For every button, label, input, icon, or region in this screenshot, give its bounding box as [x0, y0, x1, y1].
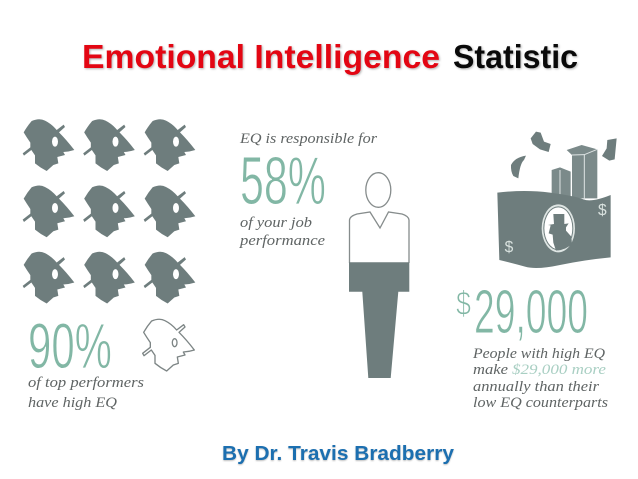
caption: top performers: have high EQ: [28, 395, 117, 411]
caption: top performers: of top performers: [28, 375, 144, 391]
caption: job performance: [239, 215, 325, 249]
title: Statistic: [453, 38, 578, 75]
icon: portrait medallion: [542, 204, 575, 252]
icon: person figure: [349, 173, 409, 378]
icon: dollar signs: [505, 202, 607, 256]
byline: By Dr. Travis Bradberry: [222, 443, 455, 465]
stat: 90%: 90%: [28, 310, 112, 382]
icon: banknote: [497, 191, 611, 268]
stat: $29,000: $: [456, 285, 471, 323]
icon: buildings: [552, 145, 597, 200]
panel: 58 percent of job performance: [239, 131, 409, 378]
caption: high EQ earnings: People with high EQ: [472, 346, 605, 362]
caption: responsible: EQ is responsible for: [239, 131, 377, 147]
stat: $29,000: [456, 278, 588, 347]
caption: high EQ earnings: make: [473, 362, 508, 378]
title: Emotional Intelligence: [82, 38, 440, 75]
caption: high EQ earnings: $29,000 more: [512, 362, 606, 378]
icon: outlined head: [143, 319, 194, 371]
caption: job performance: performance: [239, 233, 325, 249]
icon: dollar signs: $: [505, 239, 514, 256]
icon: banknote with buildings: [497, 132, 617, 268]
caption: high EQ earnings: annually than their: [473, 379, 599, 395]
panel: 90 percent of top performers: [23, 119, 195, 411]
caption: job performance: of your job: [240, 215, 313, 231]
caption: top performers: [28, 375, 144, 411]
caption: high EQ earnings: low EQ counterparts: [473, 395, 608, 411]
icon: flying bills: [511, 132, 617, 178]
panel: 29,000 dollars: [456, 132, 617, 411]
stat: 58%: 58%: [240, 143, 326, 219]
caption: high EQ earnings: [472, 346, 608, 411]
icon: dollar signs: $: [598, 202, 607, 219]
icon grid: nine filled heads: [23, 119, 195, 303]
